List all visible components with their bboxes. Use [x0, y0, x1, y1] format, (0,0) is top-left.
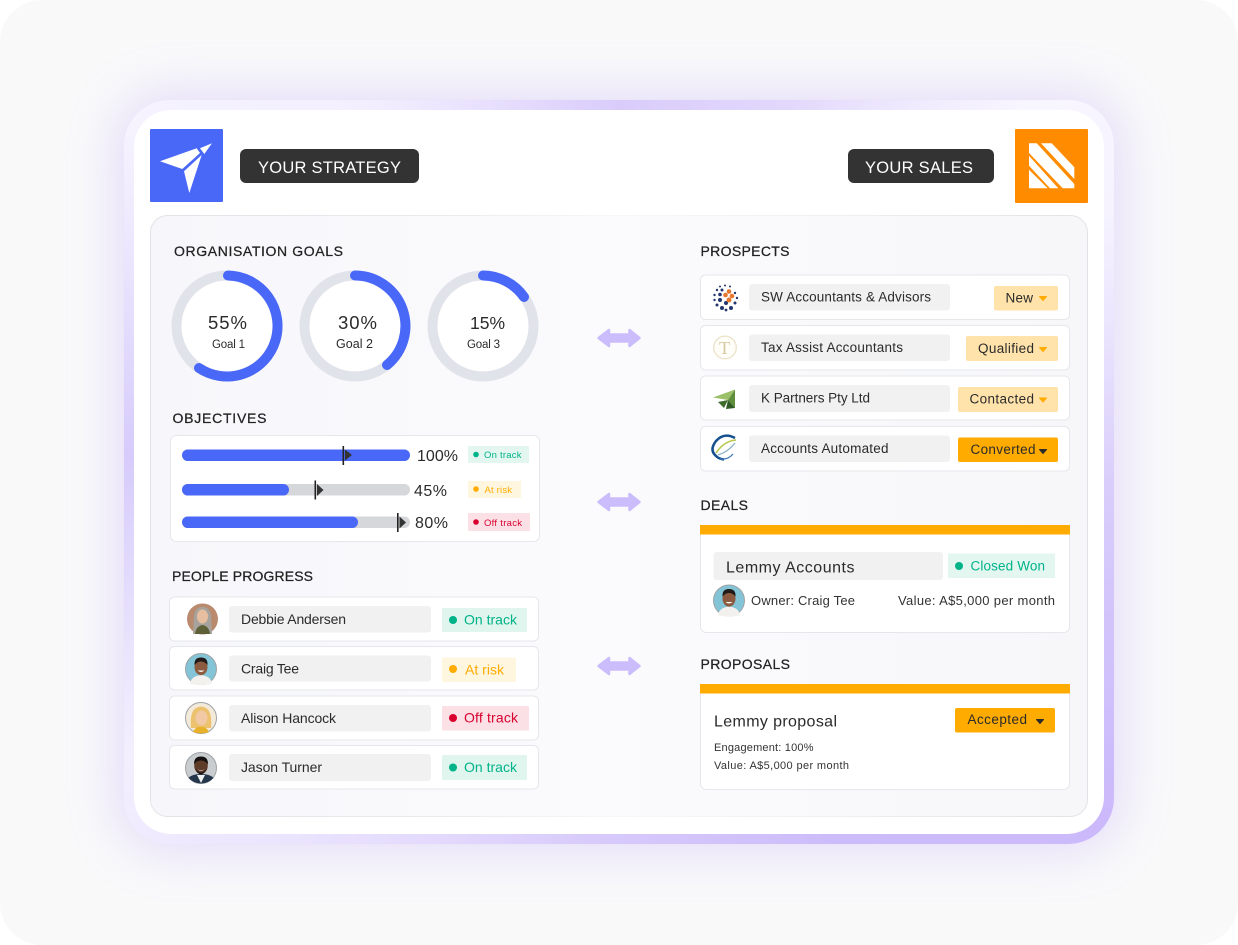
- row: SW Accountants: SW Accountants & Advisors: [761, 290, 931, 304]
- logo: SW Accountants dots: [713, 284, 738, 311]
- logo: Accounts Automated globe: [712, 436, 736, 460]
- row: Accounts Automated: Converted: [970, 442, 1036, 457]
- row: Craig Tee: At risk: [465, 662, 505, 678]
- panel: deal card: [700, 525, 1070, 632]
- label: your strategy: YOUR STRATEGY: [258, 159, 401, 177]
- row: Debbie Andersen: Debbie Andersen: [241, 611, 346, 627]
- objective bar 2: [182, 480, 521, 500]
- arrow: deals link: [598, 494, 640, 510]
- donut: goal 3: Goal 3: [467, 339, 500, 351]
- donut: goal 2: Goal 2: [336, 337, 373, 351]
- objective bar 1: 100%: [417, 448, 458, 465]
- label: your strategy: [240, 149, 419, 183]
- logo: Tax Assist T: [714, 336, 736, 359]
- donut: goal 3: [432, 276, 534, 376]
- row: Craig Tee: [170, 646, 538, 690]
- row: SW Accountants: New: [1006, 290, 1033, 306]
- panel: deal card: Closed Won: [970, 558, 1045, 574]
- avatar: Alison: [186, 702, 216, 734]
- panel: proposal card: [700, 684, 1070, 790]
- objective bar 1: On track: [484, 450, 522, 461]
- avatar: Jason: [186, 752, 216, 784]
- heading: people progress: PEOPLE PROGRESS: [172, 568, 313, 584]
- arrow: proposals link: [598, 658, 640, 674]
- row: Accounts Automated: [700, 426, 1070, 471]
- donut: goal 1: Goal 1: [212, 339, 245, 351]
- row: K Partners: Contacted: [970, 392, 1034, 406]
- row: Tax Assist: Qualified: [978, 341, 1034, 356]
- row: Debbie Andersen: On track: [464, 612, 518, 628]
- avatar: Craig: [186, 654, 216, 685]
- logo: sales: [1015, 129, 1088, 203]
- panel: deal card: Owner: Craig Tee: [751, 593, 855, 608]
- objective bar 3: 80%: [415, 515, 448, 532]
- objective bar 3: [182, 513, 530, 532]
- row: Tax Assist: Tax Assist Accountants: [761, 340, 903, 355]
- logo: strategy: [150, 129, 223, 202]
- donut: goal 2: 30%: [338, 312, 377, 333]
- heading: deals: DEALS: [700, 497, 748, 513]
- row: SW Accountants: [700, 275, 1070, 320]
- panel: proposal card: Lemmy proposal: [714, 714, 837, 730]
- row: Debbie Andersen: [170, 597, 538, 641]
- avatar: Debbie: [187, 604, 218, 634]
- panel: objectives: [170, 436, 540, 542]
- panel: proposal card: Accepted: [968, 712, 1027, 727]
- donut: goal 1: [176, 276, 278, 376]
- objective bar 3: Off track: [484, 518, 522, 529]
- row: Alison Hancock: Off track: [464, 710, 519, 726]
- objective bar 2: At risk: [484, 485, 512, 496]
- donut: goal 2: [304, 276, 406, 376]
- row: Alison Hancock: [170, 696, 538, 740]
- row: K Partners: [700, 376, 1070, 420]
- row: Accounts Automated: Accounts Automated: [761, 441, 888, 456]
- row: Jason Turner: Jason Turner: [241, 759, 322, 775]
- avatar: owner Craig Tee: [714, 585, 744, 616]
- arrow: prospects link: [598, 330, 640, 346]
- donut: goal 1: 55%: [208, 312, 247, 333]
- logo: Tax Assist T: T: [719, 338, 730, 358]
- logo: K Partners plane: [713, 390, 735, 409]
- heading: proposals: PROPOSALS: [700, 656, 790, 672]
- heading: objectives: OBJECTIVES: [172, 410, 266, 426]
- row: Jason Turner: [170, 746, 538, 789]
- panel: proposal card: Value: A$5,000 per month: [714, 760, 849, 772]
- heading: organisation goals: ORGANISATION GOALS: [174, 243, 343, 259]
- row: Tax Assist: [700, 326, 1070, 370]
- heading: prospects: PROSPECTS: [700, 243, 790, 259]
- objective bar 2: 45%: [414, 483, 447, 500]
- row: K Partners: K Partners Pty Ltd: [761, 390, 870, 406]
- row: Craig Tee: Craig Tee: [241, 660, 299, 676]
- label: your sales: [848, 149, 994, 183]
- label: your sales: YOUR SALES: [865, 159, 973, 177]
- panel: deal card: Value: A$5,000 per month: [898, 593, 1055, 608]
- panel: deal card: Lemmy Accounts: [726, 560, 854, 576]
- objective bar 1: [182, 446, 529, 465]
- row: Alison Hancock: Alison Hancock: [241, 710, 337, 726]
- row: Jason Turner: On track: [464, 759, 518, 775]
- device frame: [124, 100, 1114, 844]
- panel: proposal card: Engagement: 100%: [714, 742, 814, 754]
- panel: main content: [150, 216, 1088, 816]
- donut: goal 3: 15%: [470, 313, 505, 333]
